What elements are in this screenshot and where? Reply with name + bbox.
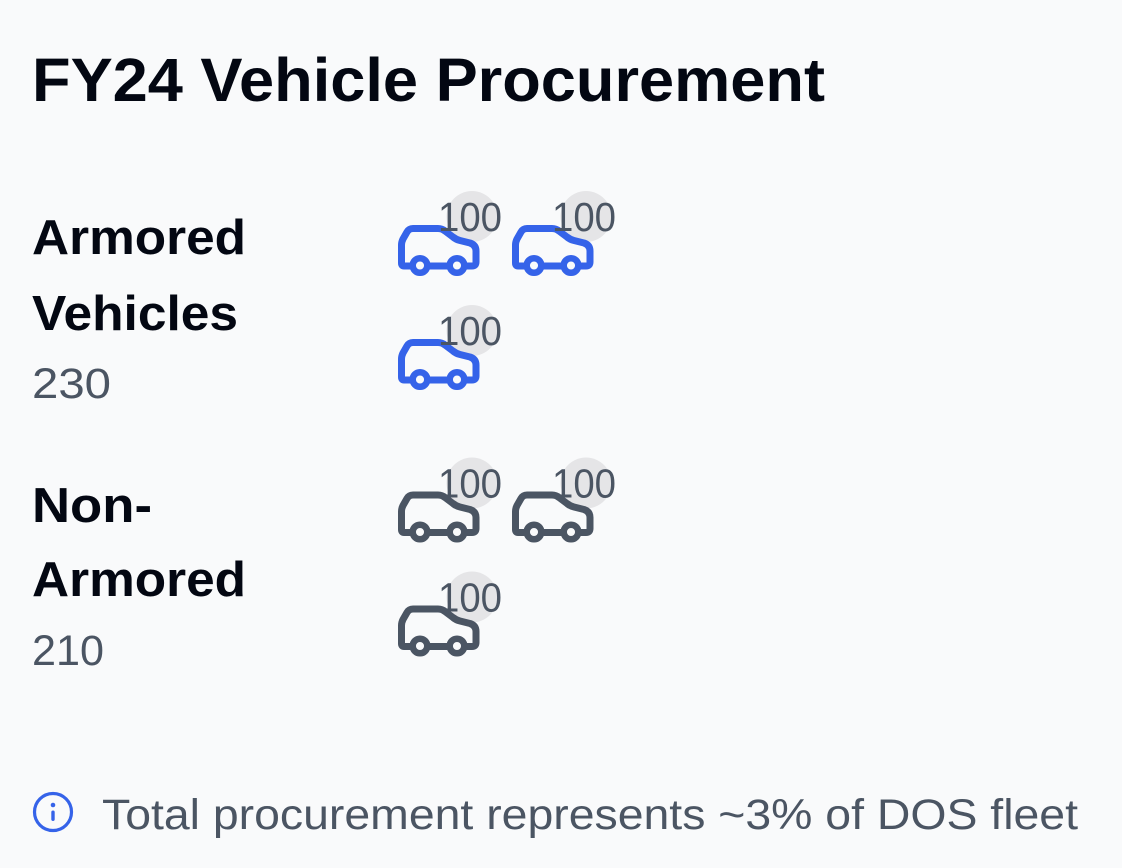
icon: gray car 2	[516, 458, 616, 539]
icon: info	[34, 794, 72, 830]
label: armored vehicles: Armored	[32, 211, 246, 265]
icon: blue car 3	[402, 305, 502, 387]
title: FY24 Vehicle Procurement	[32, 46, 825, 114]
icon: gray car 3	[402, 572, 502, 653]
icon: gray car 3: 100	[438, 574, 502, 620]
label: armored vehicles: Vehicles	[32, 287, 238, 341]
icon: blue car 3: 100	[438, 308, 502, 354]
label: armored vehicles	[32, 211, 246, 341]
value: 230: 230	[32, 360, 111, 408]
label: non-armored: Non-	[32, 479, 152, 533]
icon: blue car 2	[516, 191, 616, 273]
icon: blue car 1: 100	[438, 194, 502, 240]
panel: non-armored row	[32, 458, 616, 675]
icon: blue car 1	[402, 191, 502, 273]
icon: gray car 1	[402, 458, 502, 539]
label: non-armored: Armored	[32, 553, 246, 607]
label: non-armored	[32, 479, 246, 607]
value: 210: 210	[32, 627, 104, 675]
icon: gray car 2: 100	[552, 460, 616, 506]
panel: armored vehicles row	[32, 191, 616, 408]
icon: blue car 2: 100	[552, 194, 616, 240]
footnote: Total procurement represents ~3% of DOS fleet	[102, 791, 1078, 839]
icon: gray car 1: 100	[438, 460, 502, 506]
